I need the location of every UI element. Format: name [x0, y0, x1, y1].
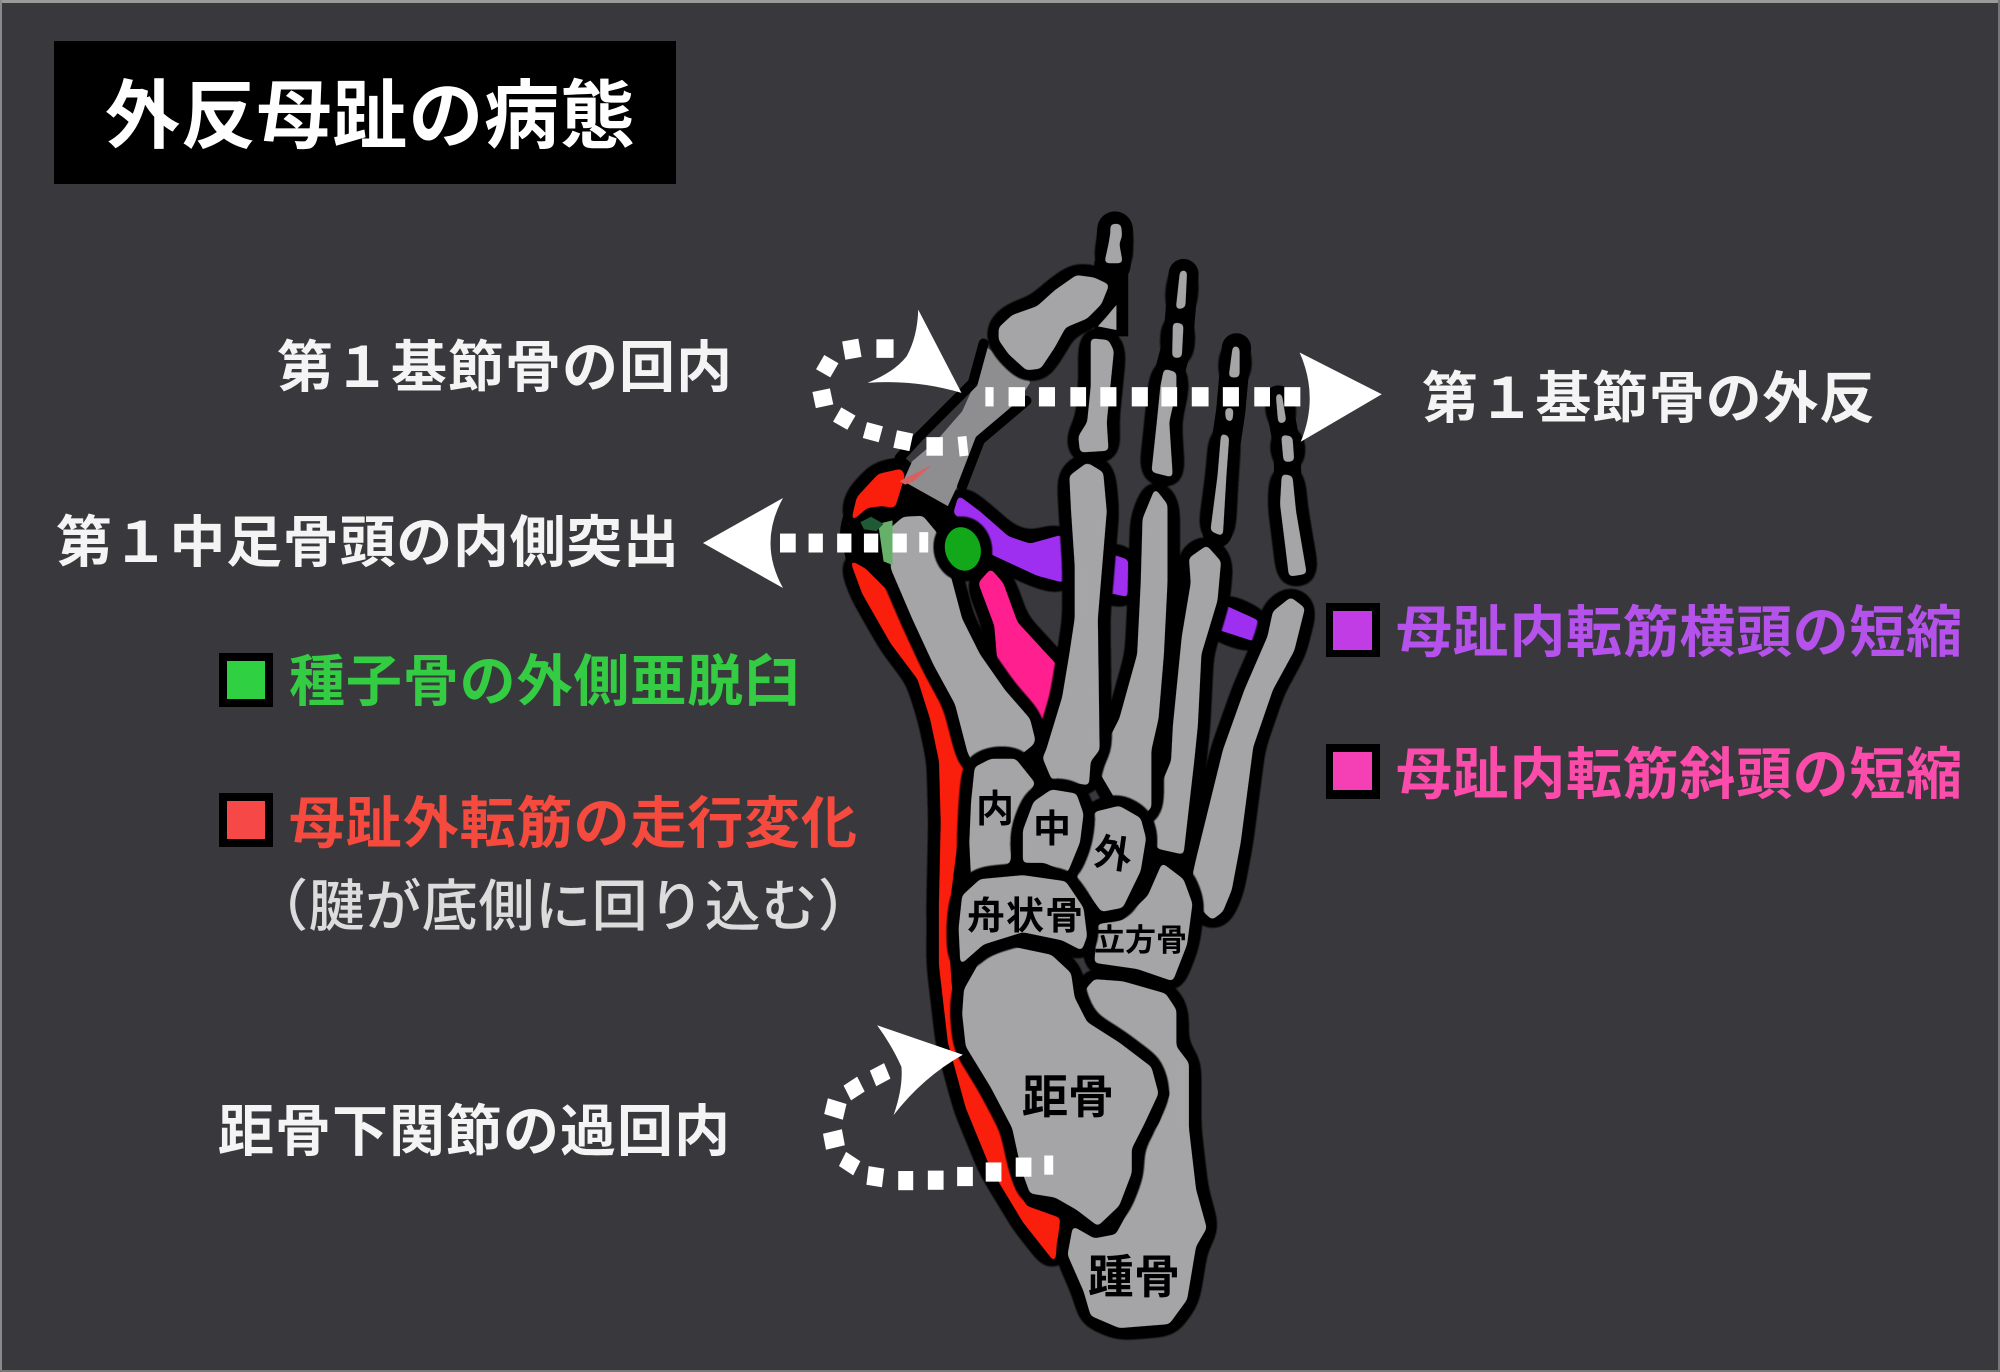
- talus label: 距骨: [1022, 1071, 1114, 1123]
- black silhouette: hallux tip: [1113, 229, 1115, 265]
- second toe proximal phalanx: [1078, 338, 1114, 452]
- second metatarsal: [1042, 462, 1107, 785]
- adductor oblique head: [978, 569, 1059, 722]
- fifth metatarsal: [1192, 597, 1305, 920]
- bone labels: [967, 789, 1187, 1303]
- adductor oblique head: small part: [1100, 704, 1113, 735]
- adductor transverse head: part two: [1103, 552, 1128, 597]
- fourth metatarsal: [1151, 545, 1221, 855]
- talus: [962, 947, 1159, 1226]
- displaced sesamoid shadow: [860, 517, 884, 531]
- black silhouette: third toe: [1162, 274, 1184, 472]
- lateral cuneiform: [1076, 806, 1146, 912]
- third metatarsal: [1100, 488, 1167, 818]
- black silhouette: fourth toe: [1217, 348, 1236, 533]
- label: first metatarsal head medial protrusion: 第１中足骨頭の内側突出: [56, 511, 679, 574]
- label: first proximal phalanx valgus: 第１基節骨の外反: [1422, 367, 1875, 430]
- first phalanx ghost (deviated shaft): [903, 347, 1030, 506]
- displaced sesamoid (faded): [878, 520, 892, 565]
- cuboid: [1094, 863, 1192, 981]
- foot skeleton: [840, 224, 1307, 1328]
- second toe middle phalanx sliver: [1098, 305, 1116, 330]
- adductor transverse head: medial part: [953, 495, 1064, 583]
- ghost outline left: [900, 344, 984, 458]
- adductor transverse head: lateral part: [1216, 604, 1259, 642]
- third toe phalanges: [1151, 270, 1187, 477]
- medial cuneiform label: 内: [976, 789, 1014, 831]
- arrow: medial protrusion (dotted, leftwards): [703, 498, 928, 588]
- navicular label: 舟状骨: [967, 896, 1083, 938]
- legend: adductor oblique head: 母趾内転筋斜頭の短縮: [1396, 743, 1962, 806]
- first metatarsal shaft and head: [891, 516, 1035, 767]
- medial cuneiform: [969, 759, 1035, 879]
- salmon overlap: [900, 465, 932, 485]
- label: first proximal phalanx pronation: 第１基節骨の回内: [277, 336, 732, 399]
- label: subtalar hyperpronation: 距骨下関節の過回内: [218, 1100, 730, 1163]
- ghost outline right: [962, 401, 1026, 486]
- hallux proximal phalanx: [999, 275, 1109, 370]
- title: 外反母趾の病態: [105, 74, 635, 158]
- note: tendon wraps to plantar side: （腱が底側に回り込む）: [252, 875, 874, 938]
- legend: sesamoid: 種子骨の外側亜脱臼: [289, 650, 800, 713]
- title: [54, 41, 676, 184]
- abductor hallucis: main part: [850, 560, 1060, 1263]
- black strip behind hallux tip: [1094, 261, 1128, 336]
- sesamoid (green): [940, 523, 986, 575]
- abductor hallucis: upper part: [851, 469, 905, 522]
- cuboid label: 立方骨: [1094, 923, 1187, 958]
- arrow: subtalar pronation (curved dotted): [823, 1025, 1053, 1190]
- arrow: valgus (horizontal dotted, rightwards): [985, 352, 1382, 442]
- navicular: [959, 875, 1087, 965]
- fourth toe phalanges: [1210, 345, 1240, 536]
- calcaneus: [1067, 979, 1207, 1328]
- adductor transverse head: part three: [1169, 563, 1184, 611]
- legend: adductor transverse head: 母趾内転筋横頭の短縮: [1396, 601, 1962, 664]
- fifth toe phalanges: [1276, 394, 1307, 577]
- middle cuneiform: [1023, 789, 1084, 873]
- lateral cuneiform label: 外: [1091, 832, 1134, 878]
- black silhouette: fifth toe: [1278, 399, 1298, 569]
- hallux distal phalanx: [1104, 224, 1123, 263]
- arrow: phalanx pronation (curved dotted): [812, 310, 968, 456]
- black joint capsule: [840, 456, 957, 583]
- legend: abductor hallucis: 母趾外転筋の走行変化: [289, 792, 857, 855]
- middle cuneiform label: 中: [1033, 809, 1071, 851]
- calcaneus label: 踵骨: [1088, 1251, 1180, 1303]
